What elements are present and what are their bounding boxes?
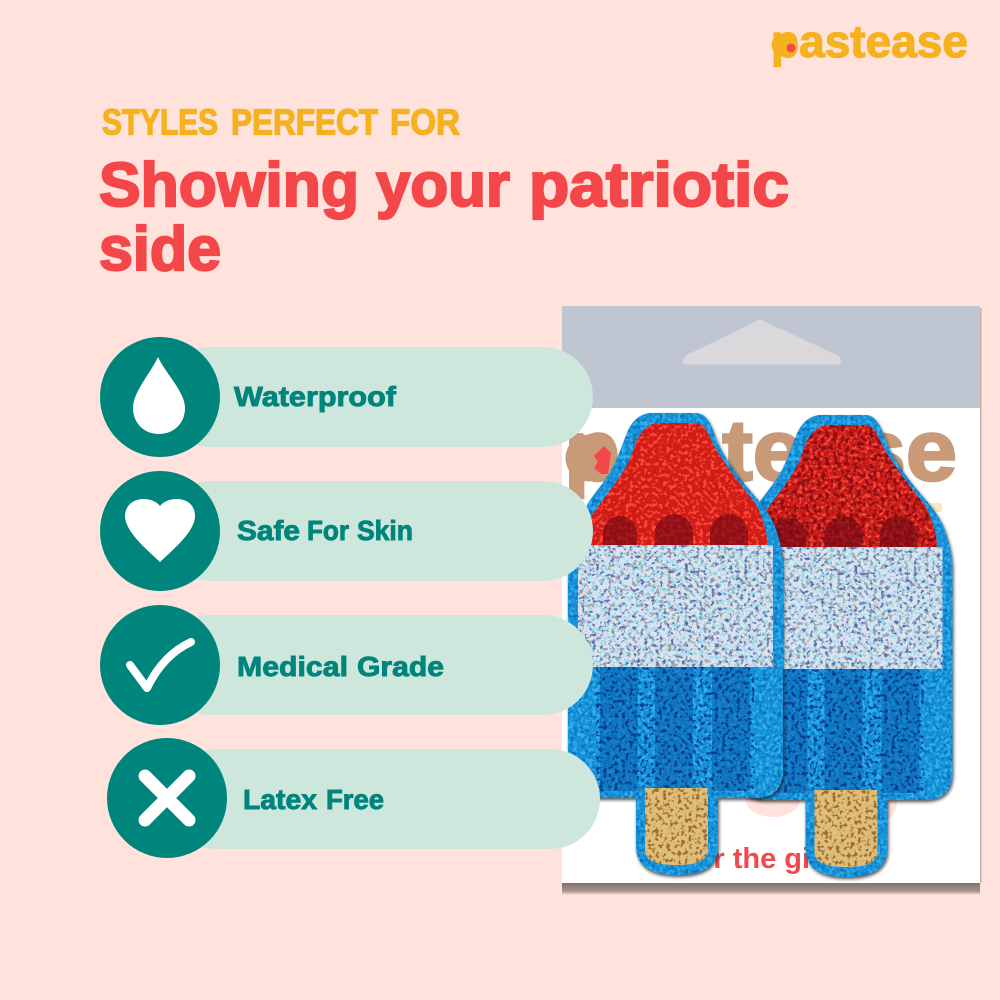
label: Safe: [237, 515, 300, 546]
pill: [167, 749, 600, 849]
label: Free: [326, 784, 384, 815]
icon circle: [100, 605, 220, 725]
label: Waterproof: [234, 381, 397, 412]
feature: safe for skin: [100, 471, 593, 591]
title: Showing: [99, 151, 359, 220]
pill: [160, 481, 593, 581]
heading: styles perfect for: PERFECT: [231, 102, 378, 142]
title: side: [99, 215, 221, 284]
label: Latex: [243, 784, 317, 815]
icon circle: [107, 738, 227, 858]
popsicle pasty right: [746, 414, 956, 882]
pill: [160, 347, 593, 447]
label: Grade: [357, 651, 444, 682]
icon: check mark: [130, 642, 191, 688]
pill: [160, 615, 593, 715]
icon: heart: [125, 499, 195, 562]
label: For: [307, 515, 349, 546]
card shadow: [562, 882, 980, 895]
title: [99, 151, 789, 284]
icon: cross: [145, 776, 189, 820]
card header: [562, 306, 980, 408]
title: your: [376, 151, 510, 220]
package logo: pastease: [564, 403, 957, 499]
logo p bowl: [772, 34, 794, 56]
icon circle: [100, 337, 220, 457]
feature: medical grade: [100, 605, 593, 725]
feature: latex free: [107, 738, 600, 858]
icon: red maple leaf in logo: [786, 44, 796, 52]
label: [237, 515, 413, 546]
icon circle: [100, 471, 220, 591]
package leaf: [594, 446, 611, 474]
label: Medical: [237, 651, 348, 682]
label: [243, 784, 384, 815]
heading: styles perfect for: STYLES: [102, 102, 218, 142]
label: [237, 651, 444, 682]
heading: styles perfect for: FOR: [390, 102, 460, 142]
hang hole: [683, 320, 841, 364]
package small text: [927, 503, 942, 512]
feature: waterproof: [100, 337, 593, 457]
card body: [562, 408, 980, 883]
popsicle pasty left: [560, 405, 790, 885]
title: patriotic: [529, 151, 789, 220]
icon: water drop: [133, 357, 185, 434]
heading: styles perfect for: [102, 102, 460, 142]
package pink blobs: [746, 780, 897, 820]
package p bowl: [566, 434, 612, 482]
logo: pastease: pastease: [771, 16, 968, 67]
panel: product package: [562, 306, 982, 895]
package tagline: for the girls: [686, 843, 846, 875]
label: Skin: [357, 515, 413, 546]
